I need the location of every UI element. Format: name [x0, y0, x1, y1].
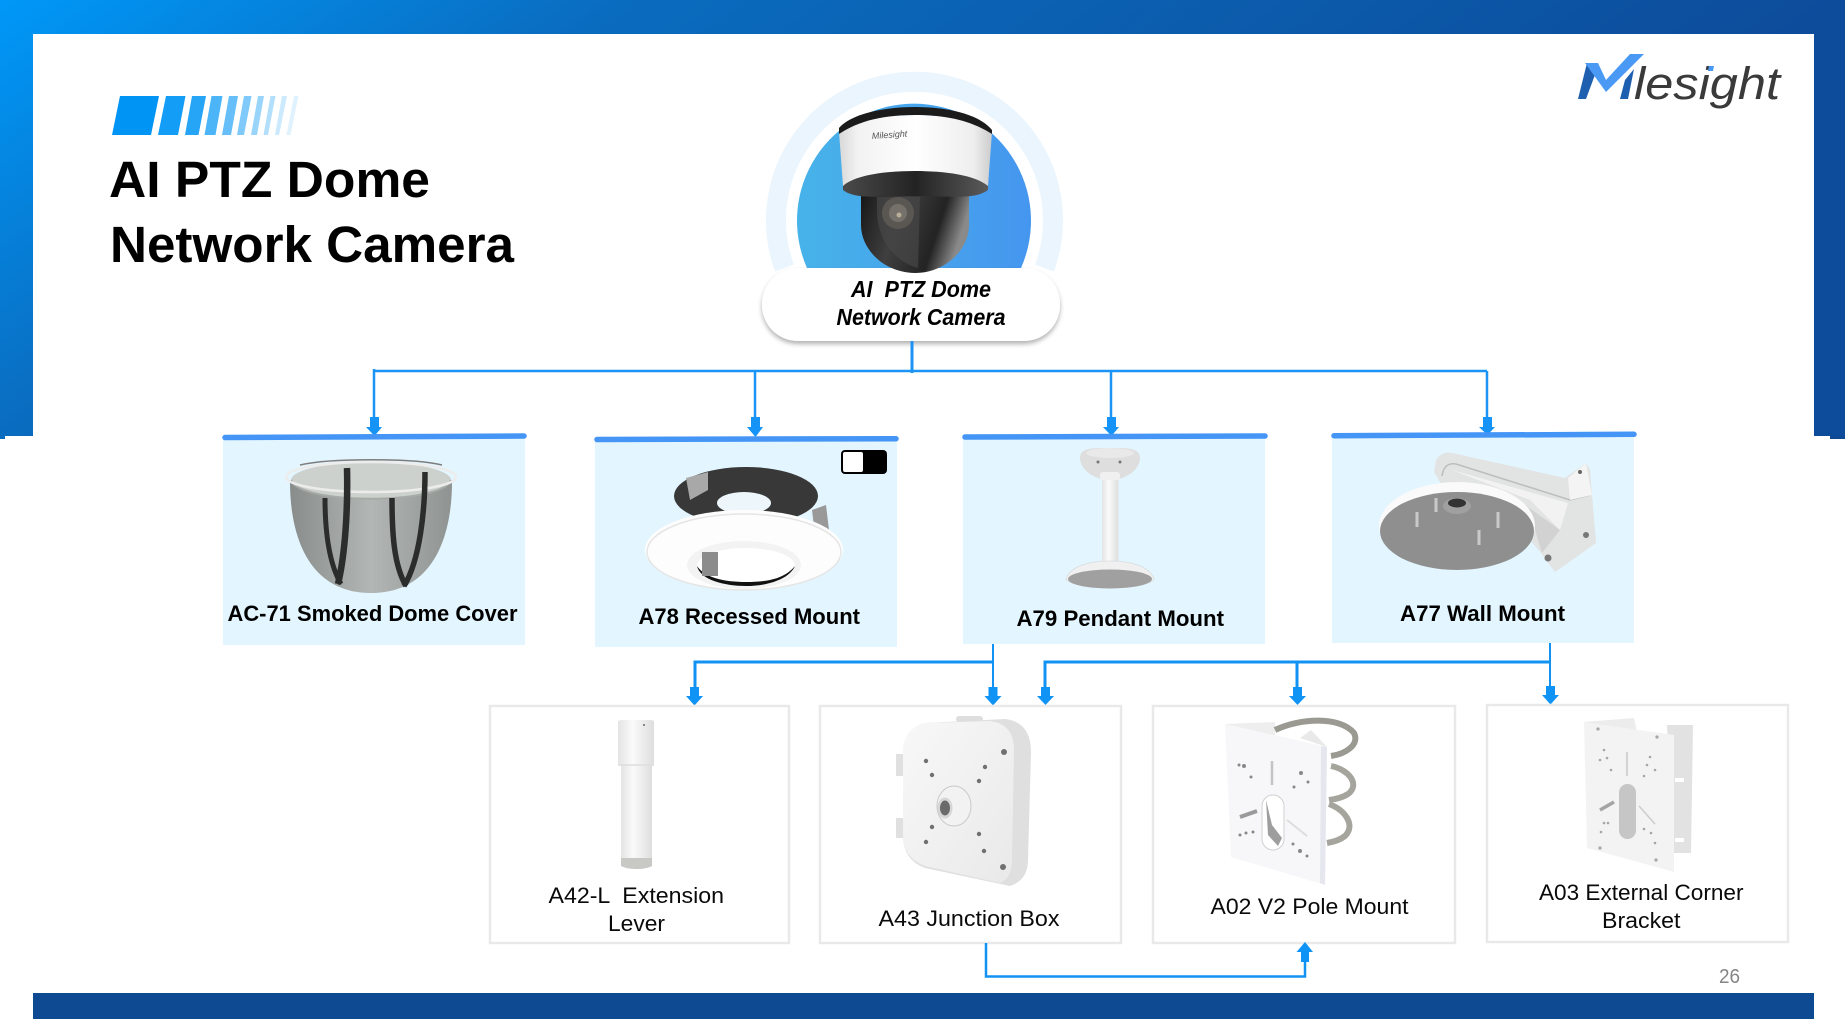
- arrows to mounts: [366, 417, 1495, 437]
- hero: camera in circle: [762, 82, 1060, 341]
- arrows to accessories: [686, 686, 1559, 706]
- connector tree: camera to mounts: [374, 341, 1487, 420]
- label: A02 V2 Pole Mount: [1210, 894, 1408, 919]
- label: A79 Pendant Mount: [1016, 606, 1225, 631]
- box: A02 V2 Pole Mount: [1153, 706, 1455, 943]
- card: A78 Recessed Mount: [595, 439, 897, 647]
- label pill: [762, 268, 1060, 341]
- label: A77 Wall Mount: [1400, 601, 1566, 626]
- icon: corner bracket: [1584, 718, 1693, 872]
- card: A77 Wall Mount: [1332, 434, 1634, 643]
- label: A03 External Corner: [1539, 880, 1744, 905]
- icon: wall mount: [1379, 453, 1596, 572]
- label pill: Network Camera: [836, 304, 1006, 330]
- connector tree: mounts to accessories: [695, 643, 1550, 690]
- camera: Milesight: [871, 129, 908, 141]
- label: Bracket: [1602, 908, 1680, 933]
- label: A43 Junction Box: [878, 906, 1060, 931]
- icon: dome cover: [286, 460, 456, 593]
- card: AC-71 Smoked Dome Cover: [223, 436, 525, 645]
- label: A42-L Extension: [548, 883, 724, 908]
- title: Network Camera: [110, 216, 515, 273]
- icon: junction box: [896, 716, 1031, 886]
- slide frame: [0, 0, 1845, 439]
- icon: pole mount: [1225, 721, 1355, 885]
- label: Lever: [608, 911, 665, 936]
- box: A42-L Extension Lever: [490, 706, 789, 943]
- card: A79 Pendant Mount: [963, 436, 1265, 644]
- connector: junction box to pole mount: [986, 942, 1313, 976]
- title: AI PTZ Dome: [109, 151, 430, 208]
- title: [109, 151, 515, 273]
- logo: Milesight: lesight: [1634, 58, 1783, 109]
- box: A03 External Corner Bracket: [1487, 705, 1788, 942]
- icon: pendant mount: [1066, 448, 1154, 588]
- label: AC-71 Smoked Dome Cover: [228, 601, 518, 626]
- label pill: AI PTZ Dome: [850, 276, 991, 302]
- icon: toggle: [841, 450, 887, 474]
- camera: [839, 107, 992, 273]
- logo: Milesight: [1578, 54, 1783, 109]
- footer bar: [33, 993, 1814, 1019]
- label: [1539, 880, 1744, 933]
- title decoration stripes: [112, 96, 298, 135]
- box: A43 Junction Box: [820, 706, 1121, 943]
- icon: extension lever: [618, 720, 654, 869]
- label: A78 Recessed Mount: [638, 604, 861, 629]
- icon: recessed mount: [645, 467, 843, 590]
- page number: 26: [1719, 966, 1740, 988]
- label: [548, 883, 724, 936]
